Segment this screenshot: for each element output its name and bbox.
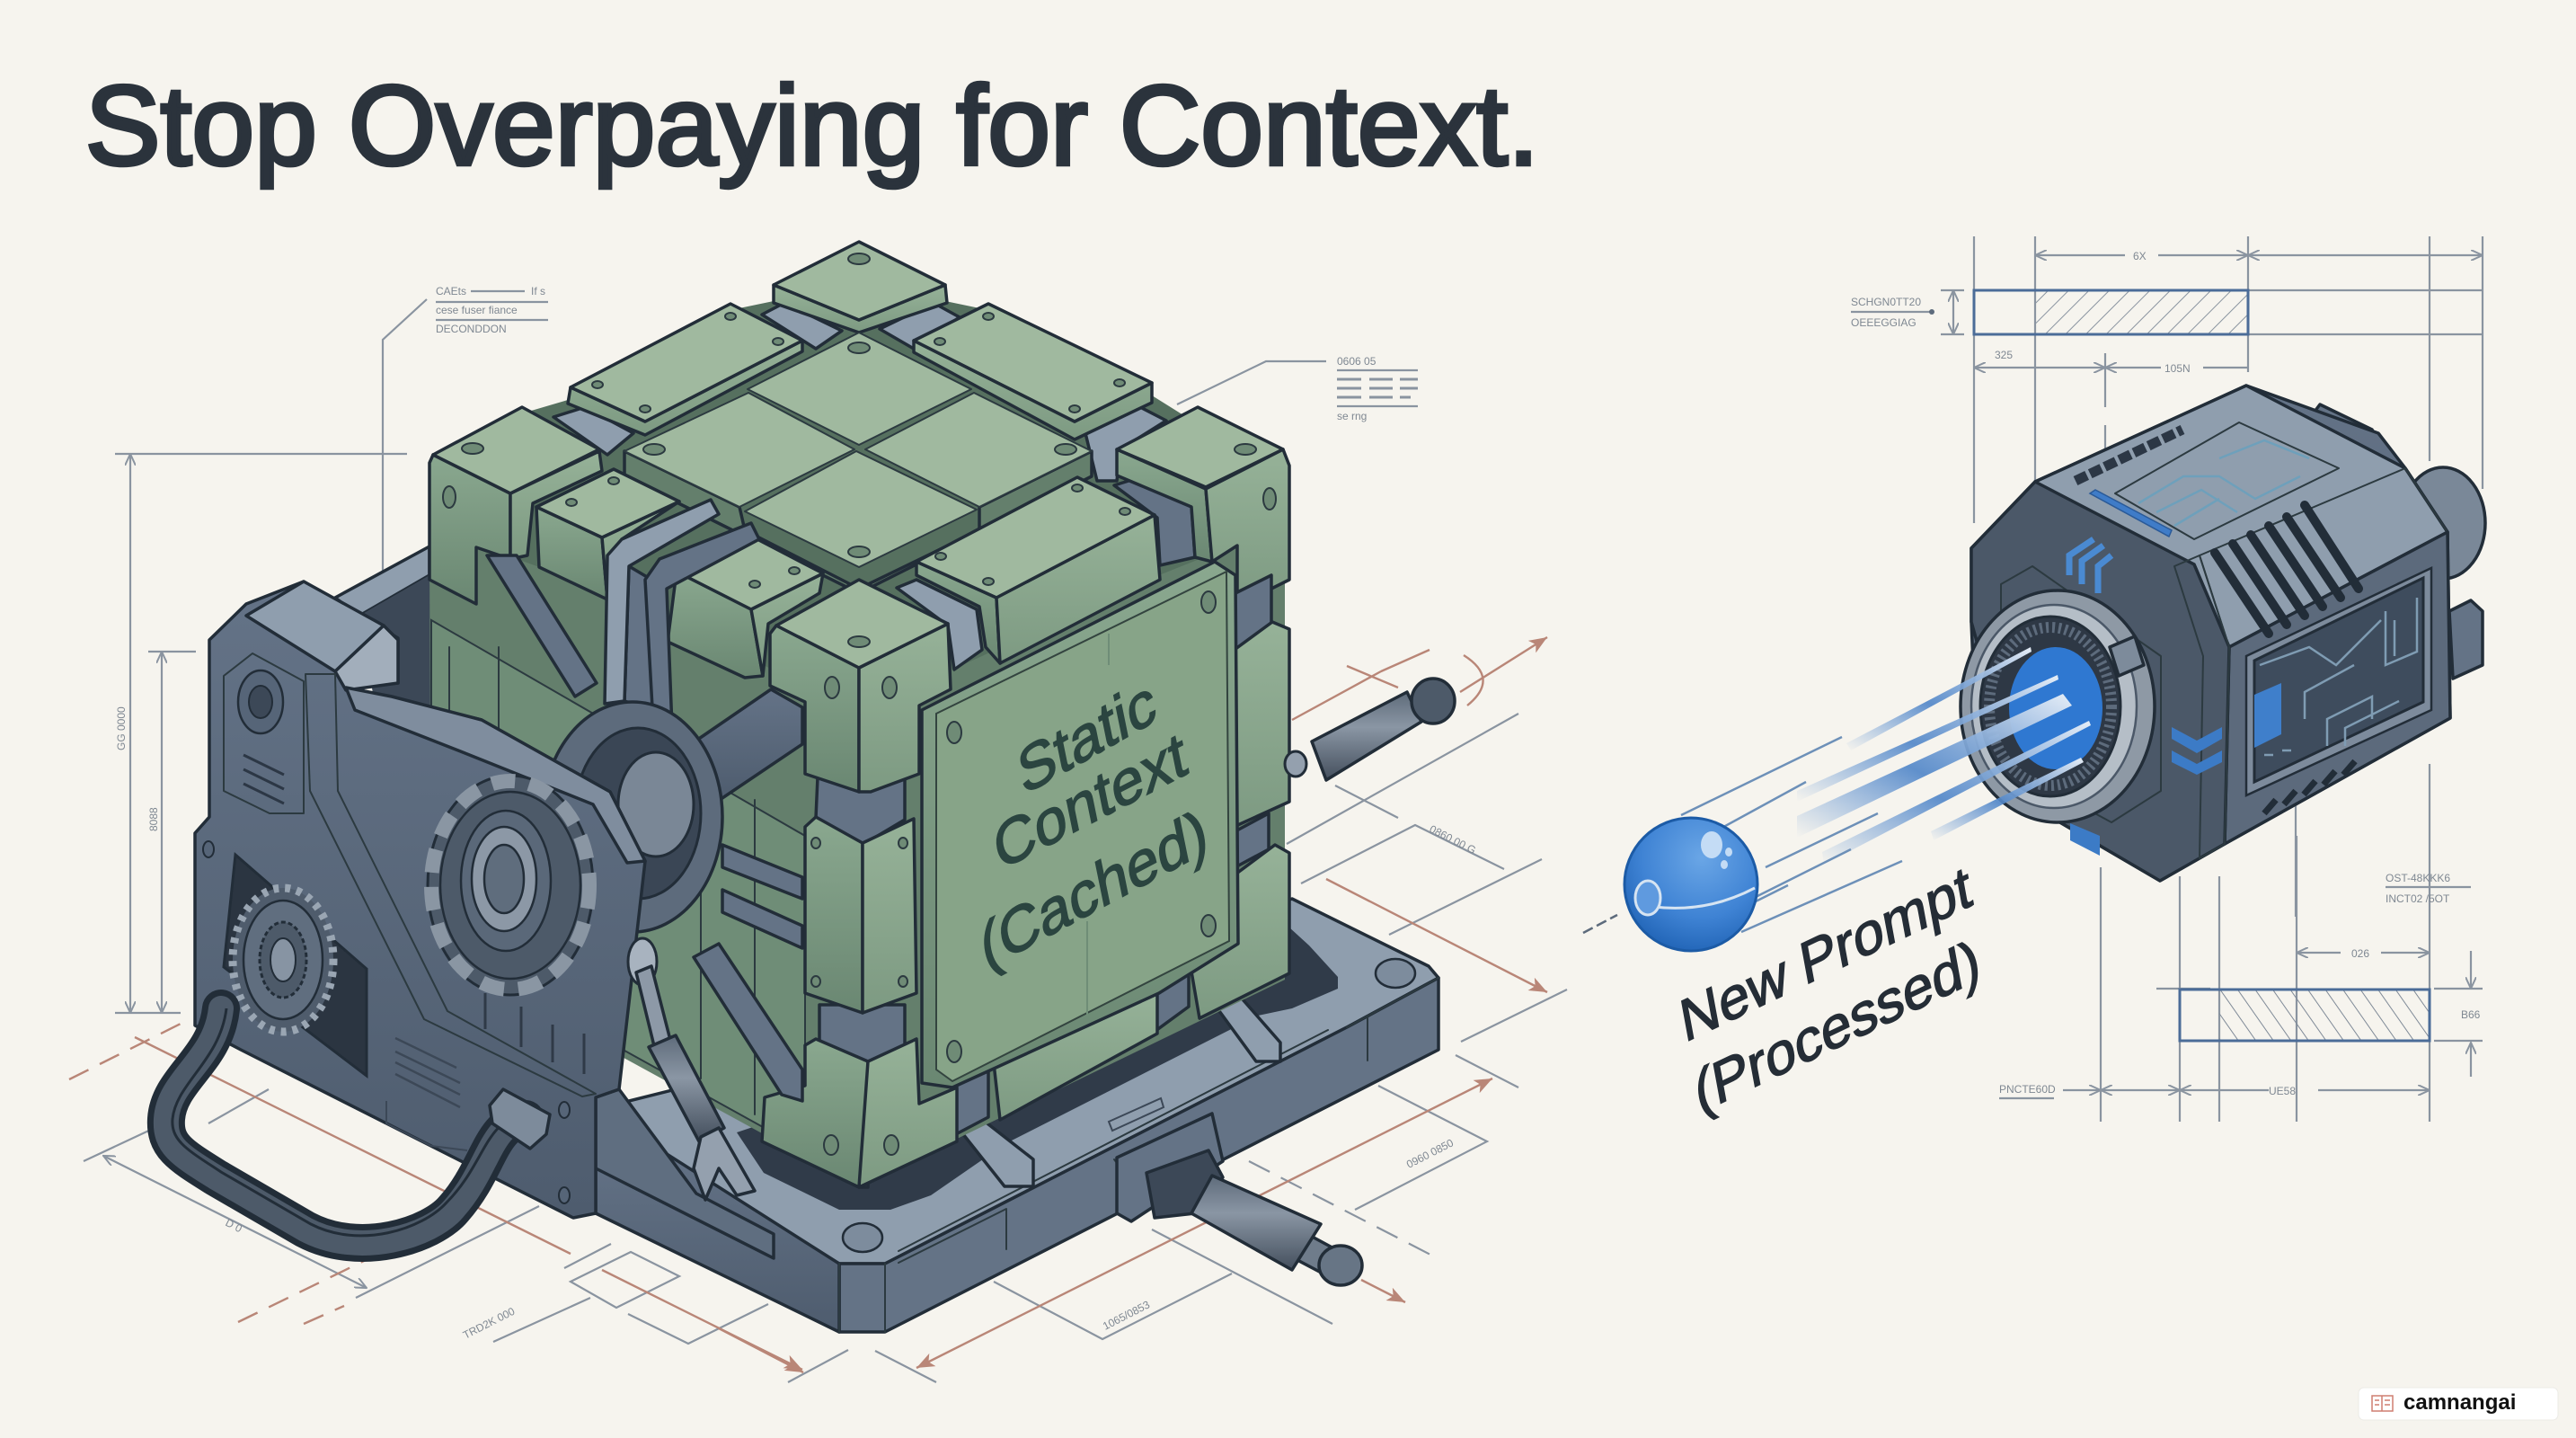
body silhouette	[1971, 386, 2450, 881]
blue square	[2254, 683, 2281, 748]
right machine dimensions	[1851, 236, 2483, 523]
panel label: static context: Context	[987, 717, 1192, 884]
vertical dimension labels	[115, 706, 160, 831]
top face	[2035, 386, 2448, 647]
front inset	[2001, 566, 2161, 822]
bottom drawing labels: UE58	[2269, 1085, 2296, 1097]
top drawing labels: OEEEGGIAG	[1851, 316, 1917, 329]
base slot	[1109, 1098, 1164, 1131]
base bolts	[843, 959, 1415, 1252]
cable connector	[490, 1089, 550, 1149]
blue core	[2009, 647, 2102, 769]
frame lower vent bars	[485, 993, 584, 1074]
vent slats	[2215, 505, 2359, 634]
front column lower	[762, 1039, 957, 1187]
upper right actuator	[1285, 679, 1455, 780]
cylinder body	[1191, 1176, 1321, 1270]
recess panel	[224, 653, 304, 813]
vent face	[2200, 468, 2448, 647]
side screen	[2246, 568, 2431, 795]
hub flange	[543, 702, 722, 932]
frame diagonal beam	[305, 674, 596, 1096]
lower left face	[431, 620, 805, 1150]
front panel	[936, 572, 1229, 1081]
frame cap	[246, 581, 398, 690]
right corner block	[1117, 407, 1289, 606]
book icon	[2372, 1396, 2393, 1411]
right connectors	[816, 575, 1271, 1135]
top screen	[2115, 422, 2339, 539]
right column upper	[1232, 622, 1289, 828]
front left face	[1971, 482, 2229, 881]
frame body	[195, 581, 645, 1218]
top bumps	[2076, 430, 2182, 481]
lower right dimensions	[1999, 746, 2483, 1122]
cavity	[737, 899, 1338, 1210]
top drawing labels: 6X	[2133, 250, 2147, 262]
left machine frame	[166, 555, 802, 1258]
front cylinder clamp	[1117, 1114, 1362, 1285]
bottom drawing labels: B66	[2461, 1008, 2481, 1021]
watermark badge	[2359, 1388, 2558, 1420]
rod	[1280, 1227, 1339, 1276]
left dimension annotations	[115, 285, 548, 1013]
lower vents	[2264, 761, 2355, 813]
base right side	[839, 978, 1438, 1332]
upper right bar	[914, 304, 1152, 439]
blue top bar	[2090, 490, 2172, 537]
panel label: static context	[975, 665, 1213, 983]
green cube	[429, 242, 1289, 1187]
new prompt label: New Prompt	[1675, 852, 1976, 1055]
cube inner body	[429, 360, 1285, 1186]
hatched block bottom	[2180, 990, 2430, 1041]
isometric tiny labels: 0860 00 G	[1428, 822, 1478, 857]
top center tiles	[624, 333, 1092, 593]
top drawing labels	[1851, 250, 2191, 375]
upper-right callout	[1177, 355, 1418, 422]
bottom drawing labels: 026	[2351, 947, 2369, 960]
side piston	[628, 938, 755, 1200]
frame right strut	[596, 1089, 774, 1258]
top drawing labels: 105N	[2164, 362, 2191, 375]
top connectors	[553, 303, 1195, 565]
top-left callout text	[436, 285, 548, 335]
front corner block	[770, 580, 951, 792]
blue prompt ball	[1624, 818, 1757, 951]
dash mark between machines	[1583, 915, 1617, 933]
blue stripes	[2069, 539, 2222, 856]
left corner block	[429, 407, 602, 604]
top underlay	[436, 270, 1280, 683]
upper-right callout: 0606 05	[1337, 355, 1377, 368]
isometric tiny labels: D 0	[224, 1216, 244, 1235]
bottom drawing labels: INCT02 /5OT	[2386, 892, 2450, 905]
top-left callout text: CAEts	[436, 285, 466, 297]
isometric tiny labels: 1065/0853	[1101, 1298, 1152, 1333]
hatched block top	[1974, 290, 2248, 334]
right processing unit	[1961, 386, 2485, 881]
gray straps	[605, 500, 759, 728]
bottom bar	[994, 993, 1157, 1120]
left inner block B	[668, 537, 823, 678]
title: Stop Overpaying for Context.	[85, 64, 1539, 189]
top-left callout text: cese fuser fiance	[436, 304, 518, 316]
bottom drawing labels: PNCTE60D	[1999, 1083, 2056, 1096]
cable	[166, 1008, 526, 1243]
lens ring	[1961, 590, 2155, 822]
top-left callout text: DECONDDON	[436, 323, 507, 335]
right column lower	[1191, 845, 1289, 1018]
bottom drawing labels: OST-48KKK6	[2386, 872, 2450, 884]
base top surface	[575, 899, 1438, 1264]
isometric tiny labels: TRD2K 000	[461, 1305, 518, 1342]
frame bolts	[203, 841, 570, 1203]
top-left callout text: If s	[531, 285, 545, 297]
isometric tiny labels	[224, 822, 1478, 1342]
panel label: static context: (Cached)	[975, 795, 1213, 983]
back block	[774, 242, 947, 333]
bottom drawing labels	[1999, 872, 2481, 1098]
lower window with small gear	[224, 855, 367, 1076]
isometric tiny labels: 0960 0850	[1404, 1136, 1456, 1171]
back rail	[335, 546, 440, 809]
ring clip	[2110, 636, 2144, 676]
back cylinder	[2309, 404, 2485, 679]
panel label: static context: Static	[1013, 665, 1161, 809]
isometric dimension lines under machine	[69, 355, 1567, 1382]
new prompt label: (Processed)	[1689, 926, 1985, 1126]
front column middle	[805, 817, 916, 1013]
motion streaks	[1681, 647, 2091, 935]
cross spokes	[487, 555, 802, 1101]
lower left panels	[449, 647, 755, 1114]
right side face	[2225, 532, 2450, 844]
top drawing labels: SCHGN0TT20	[1851, 296, 1921, 308]
vertical dimension labels: 8088	[147, 807, 160, 831]
upper left bar	[568, 304, 802, 435]
upper-right callout: se rng	[1337, 410, 1367, 422]
frame label plate	[386, 1038, 467, 1150]
corner bevel	[2174, 555, 2229, 858]
front panel frame	[922, 562, 1238, 1087]
front right top bar	[897, 477, 1160, 670]
brackets	[960, 992, 1280, 1186]
top drawing labels: 325	[1995, 349, 2013, 361]
vertical dimension labels: GG 0000	[115, 706, 128, 750]
left inner block A	[536, 469, 679, 599]
watermark text: camnangai	[2403, 1390, 2516, 1415]
frame arm	[346, 688, 645, 863]
base plate	[575, 899, 1438, 1332]
large gear	[428, 776, 593, 995]
base left side	[596, 1141, 839, 1332]
end cap	[1319, 1246, 1362, 1285]
